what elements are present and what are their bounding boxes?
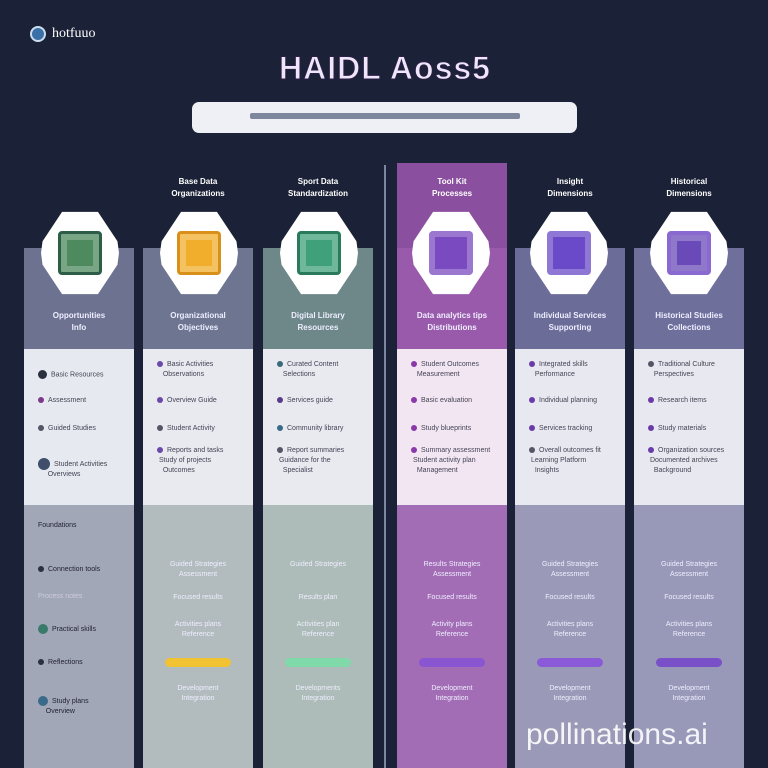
column 4: Student Outcomes — [421, 361, 479, 368]
column 1 — [24, 248, 134, 768]
logo — [30, 26, 96, 42]
heading col 2: Base Data — [179, 177, 217, 186]
column 2: Integration — [181, 695, 215, 702]
column 2: Study of projects — [159, 457, 211, 464]
column 3: Guidance for the — [279, 457, 331, 464]
divider line — [384, 165, 386, 768]
title: HAIDL Aoss5 — [279, 50, 491, 86]
icon: hexagon 1 — [41, 211, 119, 295]
column 2: Organizational — [170, 311, 226, 320]
column 6: Guided Strategies — [661, 561, 717, 568]
column 2: Assessment — [179, 571, 217, 578]
heading col 4: Tool Kit — [437, 177, 467, 186]
column 3: Curated Content — [287, 361, 338, 368]
column 3: Integration — [301, 695, 335, 702]
column 1: Connection tools — [48, 566, 100, 573]
column 1: Assessment — [48, 397, 86, 404]
column 6: Development — [668, 685, 710, 692]
column 3: Resources — [298, 323, 338, 332]
heading col 5: Insight — [557, 177, 583, 186]
column 2: Outcomes — [163, 467, 195, 474]
column 3: Guided Strategies — [290, 561, 346, 568]
heading col 3: Standardization — [288, 189, 348, 198]
highlight panel: column 4 — [397, 163, 507, 248]
column 3: Reference — [302, 631, 334, 638]
column 3: Community library — [287, 425, 343, 432]
column 4: Summary assessment — [421, 447, 490, 454]
column 4: Distributions — [427, 323, 477, 332]
heading col 2: Organizations — [171, 189, 225, 198]
column 6: Traditional Culture — [658, 361, 715, 368]
column 6: Integration — [672, 695, 706, 702]
column 5: Individual planning — [539, 397, 597, 404]
logo: hotfuuo — [52, 26, 96, 41]
icon: hexagon 4 — [412, 211, 490, 295]
column 6: Documented archives — [650, 457, 718, 464]
column 2: Overview Guide — [167, 397, 217, 404]
column 1: Guided Studies — [48, 425, 96, 432]
column 5: Individual Services — [534, 311, 606, 320]
column 5: Reference — [554, 631, 586, 638]
column 4: Focused results — [427, 594, 477, 601]
column 3: Developments — [296, 685, 340, 692]
column 4: Reference — [436, 631, 468, 638]
heading col 4 — [432, 177, 472, 198]
column 3: Results plan — [299, 594, 337, 601]
column 5: Focused results — [545, 594, 595, 601]
column 1: Foundations — [38, 522, 77, 529]
column 4: Results Strategies — [424, 561, 480, 568]
column 1: Process notes — [38, 593, 82, 600]
column 5: Performance — [535, 371, 575, 378]
column 5: Integration — [553, 695, 587, 702]
column 1: Reflections — [48, 659, 83, 666]
heading col 3: Sport Data — [298, 177, 338, 186]
heading col 5 — [547, 177, 593, 198]
column 5: Learning Platform — [531, 457, 586, 464]
column 2: Guided Strategies — [170, 561, 226, 568]
column 1: Student Activities — [54, 461, 107, 468]
column 4: Student activity plan — [413, 457, 476, 464]
column 2: Objectives — [178, 323, 218, 332]
column 3: Selections — [283, 371, 315, 378]
heading col 6 — [666, 177, 712, 198]
column 2: Focused results — [173, 594, 223, 601]
column 5: Activities plans — [547, 621, 593, 628]
column 6: Background — [654, 467, 691, 474]
column 5 — [515, 248, 625, 768]
column 4: Assessment — [433, 571, 471, 578]
column 6: Research items — [658, 397, 707, 404]
column 2: Reports and tasks — [167, 447, 223, 454]
column 1: Overview — [46, 708, 75, 715]
column 5: Development — [549, 685, 591, 692]
column 2: Activities plans — [175, 621, 221, 628]
column 3: Specialist — [283, 467, 313, 474]
column 1: Overviews — [48, 471, 80, 478]
column 5: Assessment — [551, 571, 589, 578]
column 1: Practical skills — [52, 626, 96, 633]
icon: hexagon 5 — [530, 211, 608, 295]
column 2: Student Activity — [167, 425, 215, 432]
column 3: Activities plan — [297, 621, 339, 628]
column 1: Study plans — [52, 698, 89, 705]
column 6: Organization sources — [658, 447, 724, 454]
column 4: Study blueprints — [421, 425, 471, 432]
column 4: Activity plans — [432, 621, 472, 628]
icon: hexagon 2 — [160, 211, 238, 295]
column 2: Reference — [182, 631, 214, 638]
icon: hexagon 3 — [280, 211, 358, 295]
watermark: pollinations.ai — [526, 718, 708, 751]
column 2: Observations — [163, 371, 204, 378]
heading col 3 — [288, 177, 348, 198]
column 6: Focused results — [664, 594, 714, 601]
column 5: Insights — [535, 467, 559, 474]
column 6: Study materials — [658, 425, 706, 432]
column 2: Development — [177, 685, 219, 692]
column 3: Services guide — [287, 397, 333, 404]
column 3: Report summaries — [287, 447, 344, 454]
column 1: Basic Resources — [51, 371, 104, 378]
column 6: Historical Studies — [655, 311, 723, 320]
column 5: Services tracking — [539, 425, 592, 432]
column 2: Basic Activities — [167, 361, 213, 368]
column 4: Data analytics tips — [417, 311, 487, 320]
heading col 2 — [171, 177, 225, 198]
column 4: Development — [431, 685, 473, 692]
column 6: Assessment — [670, 571, 708, 578]
column 4 — [397, 248, 507, 768]
heading col 6: Dimensions — [666, 189, 712, 198]
column 4: Integration — [435, 695, 469, 702]
column 6 — [634, 248, 744, 768]
heading col 6: Historical — [671, 177, 707, 186]
column 3 — [263, 248, 373, 768]
column 5: Overall outcomes fit — [539, 447, 601, 454]
column 5: Guided Strategies — [542, 561, 598, 568]
column 4: Measurement — [417, 371, 460, 378]
column 5: Integrated skills — [539, 361, 588, 368]
heading col 5: Dimensions — [547, 189, 593, 198]
column 4: Management — [417, 467, 458, 474]
heading col 4: Processes — [432, 189, 472, 198]
column 3: Digital Library — [291, 311, 345, 320]
search bar — [192, 102, 577, 133]
column 6: Reference — [673, 631, 705, 638]
column 6: Collections — [667, 323, 711, 332]
column 4: Basic evaluation — [421, 397, 472, 404]
column 5: Supporting — [549, 323, 591, 332]
column 1: Info — [72, 323, 86, 332]
column 6: Perspectives — [654, 371, 694, 378]
column 2 — [143, 248, 253, 768]
icon: hexagon 6 — [650, 211, 728, 295]
column 6: Activities plans — [666, 621, 712, 628]
column 1: Opportunities — [53, 311, 105, 320]
